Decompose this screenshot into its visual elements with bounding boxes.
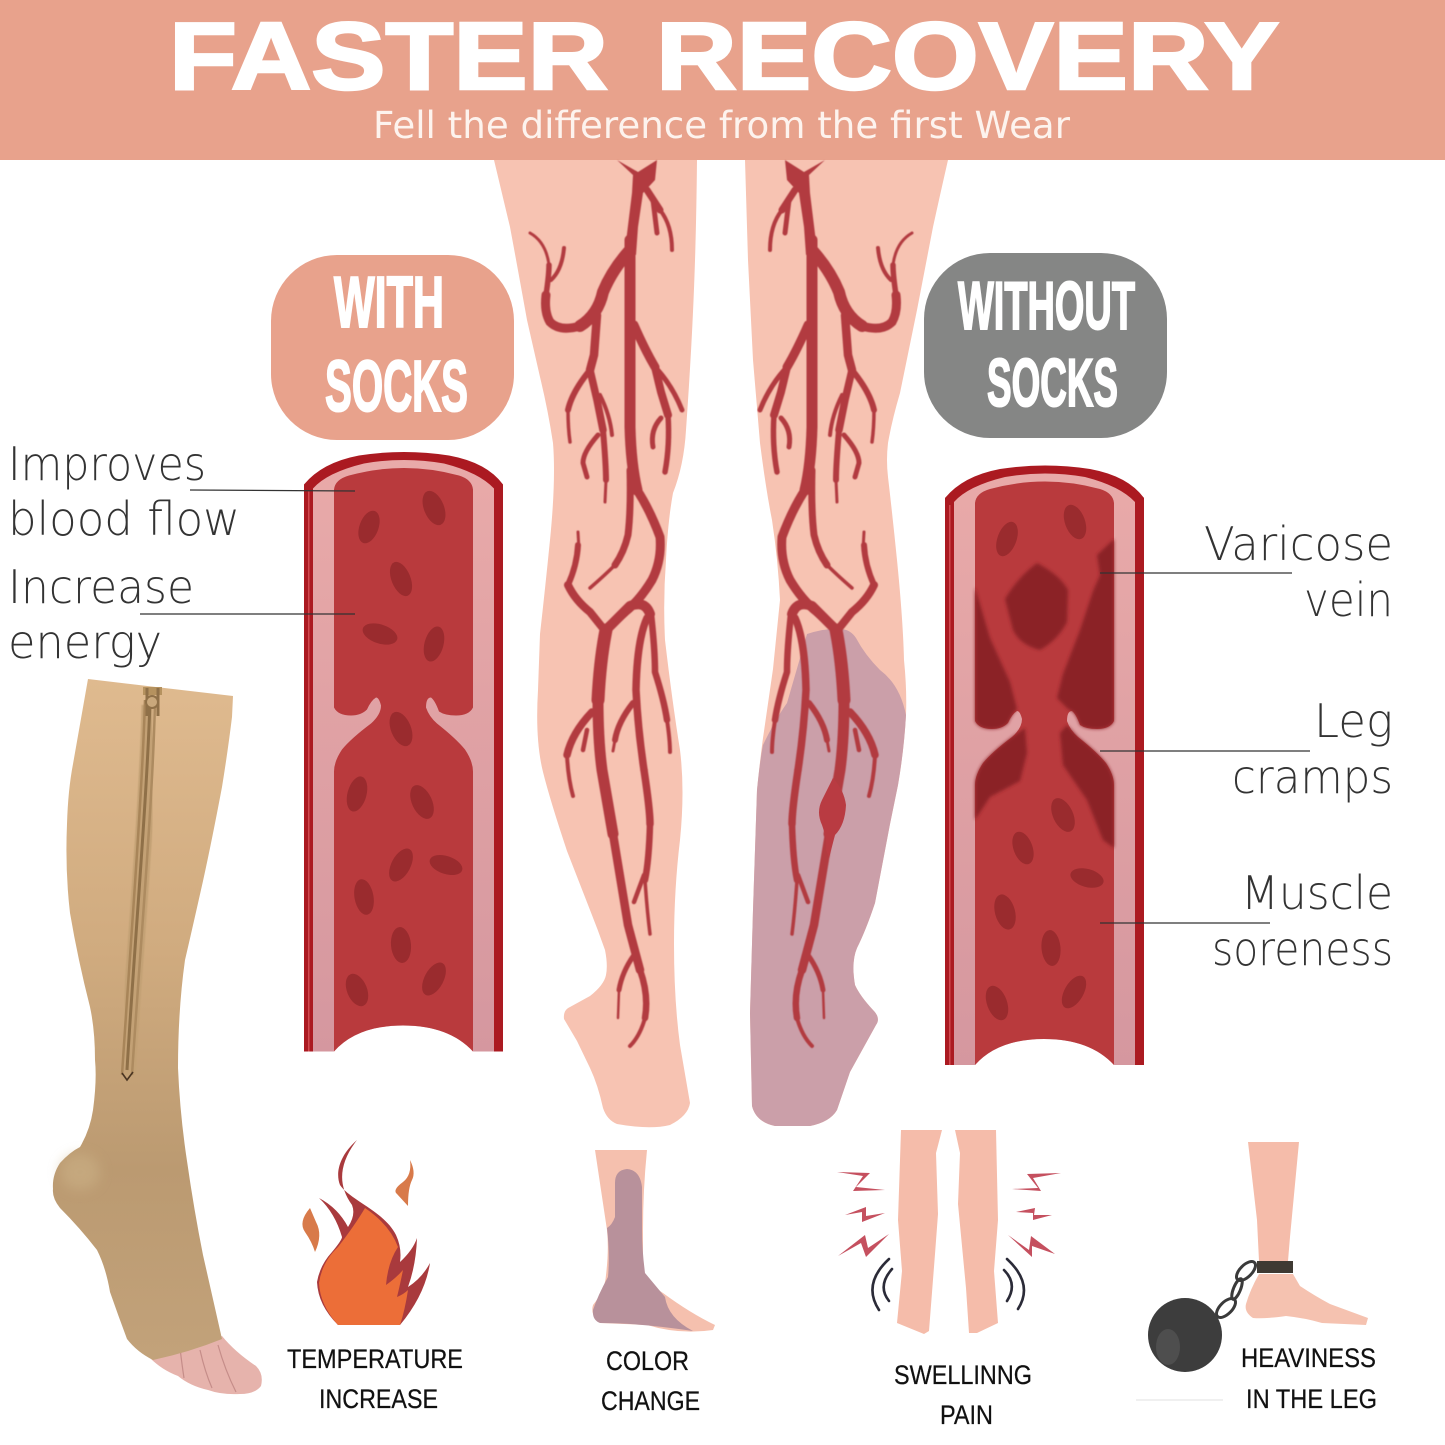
pill: with socks: WITH	[334, 263, 444, 343]
right callouts: Varicose	[1204, 517, 1393, 571]
right callouts: soreness	[1212, 922, 1393, 976]
label: color change: CHANGE	[601, 1386, 700, 1416]
label: heaviness in the leg	[1241, 1343, 1377, 1414]
label: color change	[601, 1346, 700, 1416]
blood cells	[341, 488, 465, 1010]
label: heaviness in the leg: HEAVINESS	[1241, 1343, 1376, 1373]
leg with socks: healthy	[494, 160, 697, 1127]
label: heaviness in the leg: IN THE LEG	[1246, 1384, 1377, 1414]
label: color change: COLOR	[606, 1346, 689, 1376]
blockage and pooled blood	[975, 539, 1114, 848]
vein tube: with socks	[304, 452, 503, 1052]
title	[169, 3, 1279, 110]
leg without socks: discoloured, varicose	[745, 160, 948, 1126]
veins: varicose leg	[760, 160, 912, 1046]
left callouts: energy	[8, 615, 162, 669]
icon: discoloured foot	[592, 1150, 715, 1332]
left callouts: blood flow	[8, 492, 240, 546]
icon: swelling legs with pain marks	[837, 1130, 1061, 1334]
icon: ball and chain on leg	[1148, 1142, 1368, 1372]
header banner	[0, 0, 1445, 160]
right callouts: vein	[1304, 573, 1393, 627]
vein tube: without socks	[945, 466, 1144, 1065]
label: temperature increase	[287, 1344, 463, 1414]
discoloured area	[750, 629, 906, 1126]
veins: healthy leg	[530, 160, 682, 1046]
left callouts	[8, 437, 355, 669]
sock body	[53, 679, 233, 1360]
left callouts: Improves	[8, 437, 206, 491]
toes	[150, 1336, 262, 1394]
right callouts	[1100, 517, 1393, 976]
heel highlight	[60, 1154, 100, 1190]
label: swelling pain: SWELLINNG	[894, 1360, 1032, 1390]
pill: without socks	[924, 253, 1167, 438]
pill: with socks	[271, 255, 514, 440]
blood cells	[981, 502, 1106, 1023]
pill: without socks: WITHOUT	[958, 268, 1135, 344]
right callouts: Muscle	[1241, 866, 1393, 920]
label: swelling pain	[894, 1360, 1032, 1430]
subtitle: Fell the difference from the first Wear	[373, 104, 1071, 147]
varicose bulge	[819, 778, 846, 858]
label: temperature increase: INCREASE	[319, 1384, 438, 1414]
right callouts: cramps	[1232, 750, 1393, 804]
pill: with socks: SOCKS	[325, 347, 468, 427]
pill: without socks: SOCKS	[987, 345, 1118, 421]
label: swelling pain: PAIN	[940, 1400, 993, 1430]
left callouts: Increase	[8, 560, 194, 614]
label: temperature increase: TEMPERATURE	[287, 1344, 463, 1374]
icon: flame	[302, 1140, 430, 1325]
title: FASTER	[169, 3, 608, 110]
compression sock with zipper	[53, 679, 262, 1394]
right callouts: Leg	[1314, 694, 1393, 748]
title: RECOVERY	[656, 3, 1279, 110]
zipper	[122, 687, 162, 1080]
